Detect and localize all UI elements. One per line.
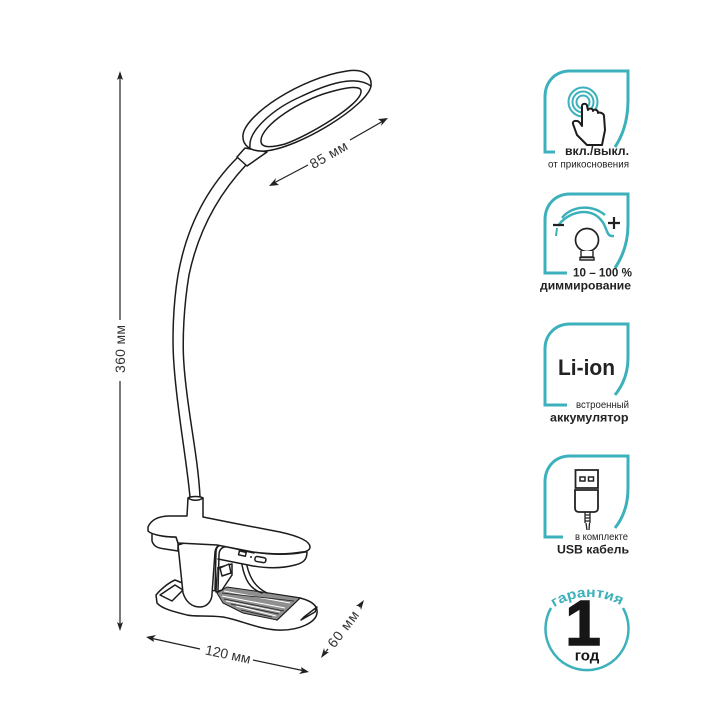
badge: USB cable: USB кабель [557,542,629,556]
dimension: height 360 mm: 360 мм [112,325,128,373]
USB port and button [239,551,266,563]
icon: touch hand with rings [568,88,605,145]
label: вкл./выкл. [565,144,629,158]
clip column [178,538,224,607]
clip lower plate [156,580,317,630]
badge: 1 year warranty [544,587,630,672]
clip upper body with neck socket [148,496,310,590]
dimension: head diameter 85 mm: 85 мм [307,137,350,172]
teal ring [546,608,628,670]
dimension: height 360 mm [112,71,128,631]
icon: dimmer arc and bulb [553,208,620,260]
dimension: head diameter 85 mm [269,118,388,186]
unit: год [575,648,600,664]
label: 10 – 100 % [573,266,632,280]
teal leaf frame [545,324,628,405]
gooseneck arm [173,158,246,497]
numeral: 1 [565,587,601,659]
dimension: width 60 mm [321,600,364,658]
arc label [553,597,622,608]
badge: Li-ion battery [545,324,629,424]
lamp head ring [243,70,371,151]
grip pad hatching [217,587,300,620]
badge: 1 year warranty: гарантия [551,590,624,607]
dimension: length 120 mm: 120 мм [204,642,252,667]
teal leaf frame [545,194,628,273]
badge: dimming: диммирование [540,278,631,292]
badge: USB cable [545,456,629,556]
icon: USB plug [575,470,598,530]
badge: dimming [540,194,632,292]
spring and clip hinge [216,564,267,593]
illustration: clip-on desk lamp [148,70,371,630]
Li-ion mark: Li-ion [558,355,615,380]
dimension: width 60 mm: 60 мм [324,607,362,651]
badge: Li-ion battery: аккумулятор [550,410,628,424]
teal leaf frame [545,71,628,152]
dimension: length 120 mm [146,635,309,674]
label: в комплекте [575,531,628,543]
badge: touch on/off: от прикосновения [548,160,629,170]
badge: touch on/off [545,71,629,170]
lamp collar [237,148,267,166]
teal leaf frame [545,456,628,537]
label: встроенный [576,399,629,411]
